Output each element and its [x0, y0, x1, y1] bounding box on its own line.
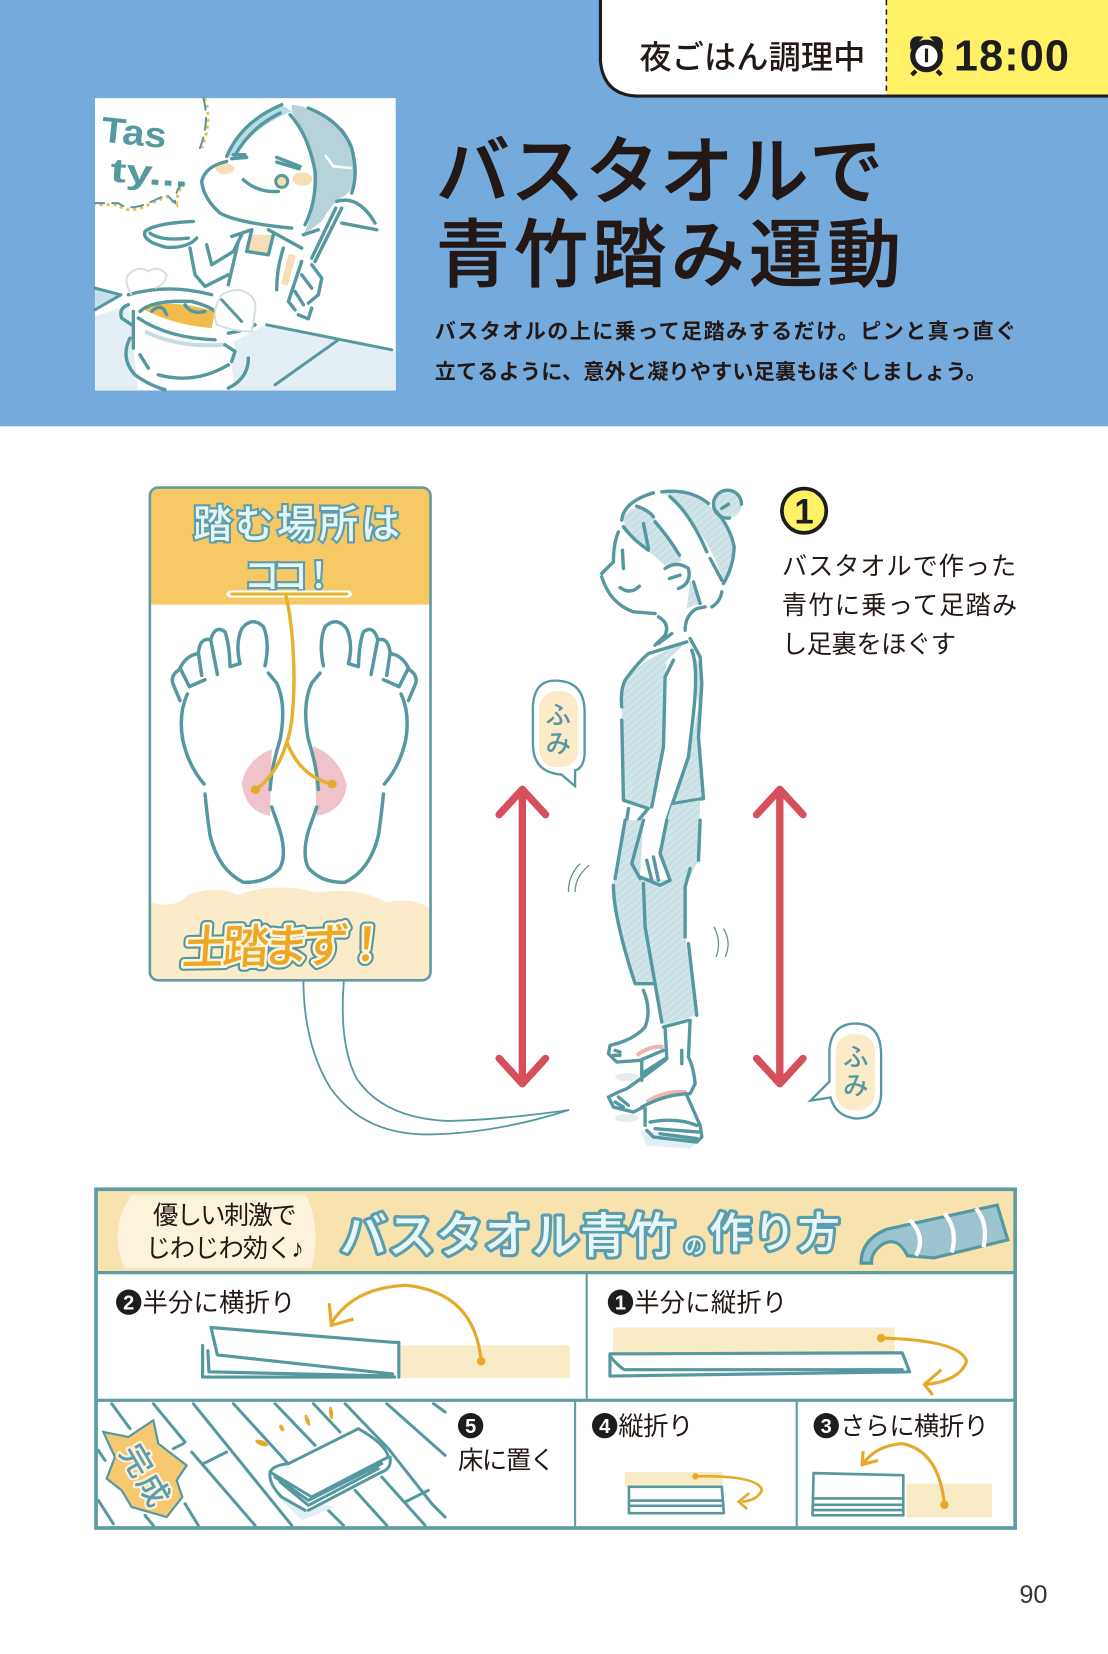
bubble text: Tas — [99, 110, 169, 156]
lower body — [568, 800, 728, 1149]
time tab — [600, 0, 1108, 96]
left foot — [172, 622, 283, 882]
intro text: バスタオルの上に乗って足踏みするだけ。ピンと真っ直ぐ — [435, 320, 1016, 344]
ladle — [337, 200, 375, 223]
panel header band: 優しい刺激で — [153, 1202, 297, 1230]
right foot — [305, 622, 416, 882]
steam — [126, 269, 167, 295]
panel header band: 作り方 — [709, 1209, 840, 1256]
panel heading: 踏む場所は — [193, 504, 400, 547]
step 1 text: バスタオルで作った — [782, 553, 1016, 581]
hair — [292, 105, 357, 235]
title: バスタオルで — [436, 130, 883, 213]
pointer lines — [230, 594, 348, 794]
illustration: standing person — [568, 490, 742, 1149]
step 1 text: 青竹に乗って足踏み — [782, 592, 1017, 620]
cell: step 2: 2 — [123, 1293, 134, 1315]
header band — [0, 0, 1108, 426]
panel: where to step: ココ！ — [244, 556, 337, 596]
panel: how to make — [96, 1189, 1015, 1528]
callout tail — [303, 979, 568, 1134]
completed badge — [103, 1420, 187, 1517]
step 1 badge: 1 — [794, 492, 814, 531]
panel caption: 土踏まず！ — [181, 919, 391, 974]
speech bubble: right: ふ — [843, 1044, 868, 1072]
cell: step 5: 5 — [465, 1416, 476, 1438]
panel header band — [96, 1189, 1015, 1272]
time: 18:00 — [954, 33, 1069, 81]
face — [216, 163, 234, 174]
title: 青竹踏み運動 — [436, 214, 901, 297]
panel frame — [96, 1189, 1015, 1528]
cell: step 1: 半分に縦折り — [634, 1290, 787, 1318]
cell: step 1: 1 — [615, 1293, 626, 1315]
speech bubble: right: み — [843, 1072, 868, 1100]
panel: where to step — [150, 488, 431, 980]
cell: step 3: さらに横折り — [840, 1413, 989, 1441]
speech bubble: right — [810, 1024, 881, 1119]
icon: alarm clock — [912, 38, 941, 75]
step 1 badge — [782, 489, 826, 533]
saucer and body — [145, 221, 302, 290]
speech bubble: left: ふ — [546, 702, 571, 730]
pot — [133, 295, 235, 382]
speech bubble: left: み — [546, 730, 571, 758]
illustration: tasting soup — [95, 98, 396, 390]
page number: 90 — [1019, 1581, 1048, 1609]
cell: step 4: 縦折り — [618, 1413, 693, 1441]
motion marks — [255, 1406, 334, 1448]
cell: step 2: 半分に横折り — [142, 1290, 295, 1318]
speech bubble — [95, 98, 208, 210]
step 1 text: し足裏をほぐす — [782, 631, 956, 659]
cell: step 5 — [98, 1404, 555, 1525]
arrow: left up-down — [499, 789, 546, 1084]
cell: step 3: 3 — [821, 1416, 832, 1438]
panel caption: 土踏まず！ — [181, 919, 391, 974]
panel header band: バスタオル青竹 — [340, 1211, 675, 1264]
step 1 text — [782, 553, 1017, 659]
towel on floor — [270, 1429, 390, 1520]
arrow: right up-down — [757, 789, 803, 1084]
title — [436, 130, 901, 297]
intro text — [435, 320, 1016, 384]
pink pressure areas — [172, 594, 416, 882]
completed badge: 完成 — [113, 1438, 177, 1513]
hat and shirt fills — [623, 490, 742, 609]
intro text: 立てるように、意外と凝りやすい足裏もほぐしましょう。 — [435, 360, 987, 384]
panel header band: じわじわ効く♪ — [146, 1235, 304, 1263]
cell: step 2 — [116, 1285, 570, 1378]
bubble text: ty... — [109, 152, 190, 195]
upper body outline — [602, 491, 734, 645]
tab label: 夜ごはん調理中 — [639, 40, 865, 76]
icon: rolled towel — [861, 1205, 1008, 1263]
cell: step 4 — [592, 1413, 762, 1513]
panel header band: の — [684, 1236, 705, 1259]
table — [95, 305, 395, 390]
floor boards — [98, 1404, 445, 1525]
cell: step 1 — [608, 1290, 967, 1395]
speech bubble: left — [533, 681, 585, 786]
cell: step 4: 4 — [599, 1416, 611, 1438]
cell: step 3 — [813, 1413, 992, 1517]
bubble text — [99, 110, 190, 195]
cell: step 5: 床に置く — [458, 1447, 555, 1475]
